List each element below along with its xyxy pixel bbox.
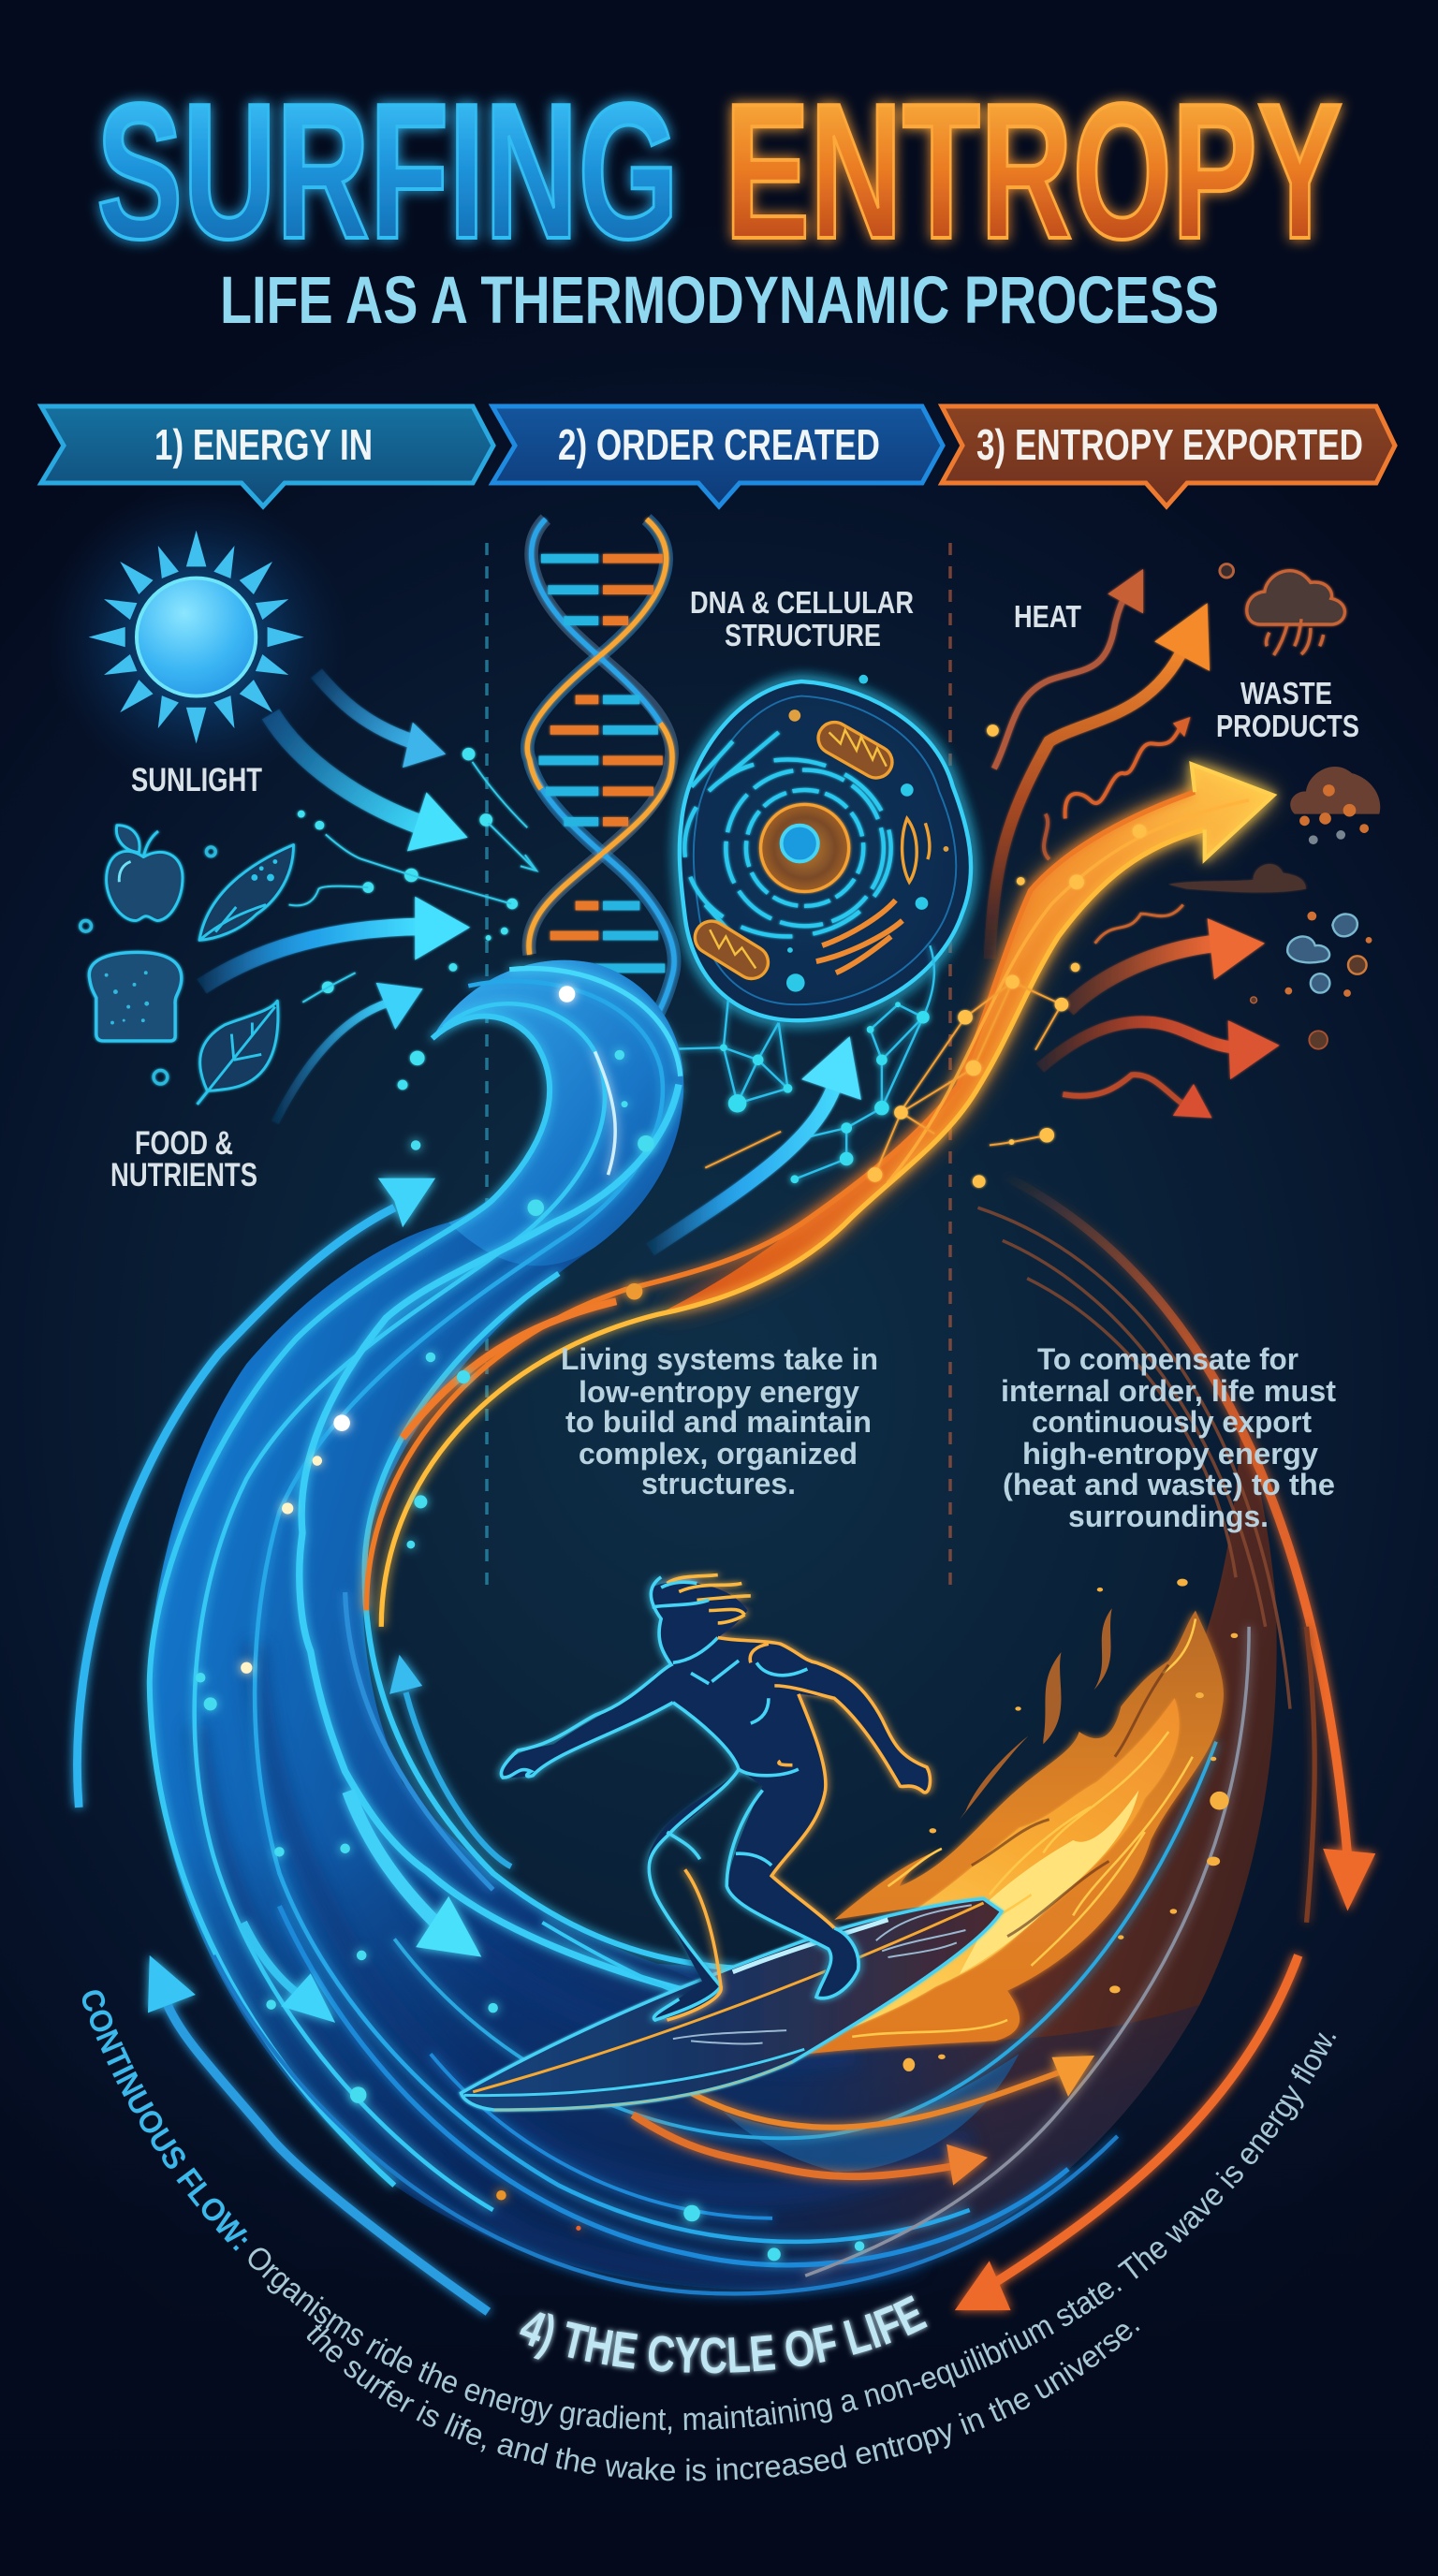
- entropy arrows: [990, 569, 1280, 1118]
- icon: ring dot: [1220, 564, 1234, 578]
- surfboard: [461, 1899, 1002, 2110]
- organelle rings: [684, 732, 891, 950]
- arrow: nutrients: [275, 983, 423, 1122]
- energy-in arrows and particles: [81, 673, 536, 1122]
- text: order created: Living systems take in: [561, 1342, 878, 1376]
- step banners: [41, 406, 1395, 506]
- icon: sun: [45, 488, 347, 787]
- banner 1: energy in: [41, 406, 493, 506]
- label: DNA and cellular structure: [690, 585, 914, 652]
- surfer orange outline: [668, 1638, 930, 2020]
- text: entropy exported: (heat and waste) to the: [1003, 1468, 1335, 1501]
- arrow: heat: [994, 569, 1143, 768]
- wisp lower: [1095, 905, 1183, 944]
- wave body shading: [150, 1683, 1199, 2290]
- column divider: left: [485, 543, 489, 1587]
- wake arrow: upper: [692, 2056, 1094, 2128]
- icon: ash cloud: [1290, 767, 1380, 844]
- arrow: small red: [1063, 1075, 1212, 1118]
- icon: smoke plume: [1168, 864, 1306, 892]
- orange node lines: [705, 982, 1062, 1175]
- arrow: red-orange: [1067, 918, 1265, 1009]
- energy particles: [289, 748, 536, 1090]
- dark wave bands: [198, 1643, 970, 2279]
- mitochondria and golgi: [689, 716, 930, 985]
- network and flow overlay: [651, 724, 1146, 1250]
- arrow head: squiggle: [1173, 717, 1191, 737]
- label: food and nutrients: [110, 1125, 257, 1193]
- wave flow lines: [150, 969, 1249, 2293]
- text: order created: structures.: [641, 1467, 796, 1500]
- network below cell: [641, 945, 934, 1183]
- surfer: [500, 1575, 930, 2020]
- text: entropy exported: high-entropy energy: [1022, 1437, 1318, 1471]
- text: order created: low-entropy energy: [579, 1375, 859, 1409]
- text: order created: complex, organized: [579, 1437, 858, 1471]
- small flame wisp: [1044, 814, 1049, 859]
- arc arrow: right orange: [1003, 1175, 1375, 1911]
- curved caption line 2: the surfer is life, and the wake is increased entropy in the universe.: [307, 2324, 1140, 2481]
- DNA rungs: [539, 559, 665, 968]
- arrow: orange rising: [990, 603, 1210, 959]
- banner 3: entropy exported: [942, 406, 1395, 506]
- wave crest: [433, 960, 683, 1266]
- flames: [744, 1579, 1238, 2071]
- label: waste products: WASTE: [1240, 676, 1332, 710]
- heading: the cycle of life: 4) THE CYCLE OF LIFE: [517, 2291, 931, 2378]
- surfer hair: [653, 1575, 751, 1623]
- arc arrow: outer left top: [77, 1178, 435, 1808]
- text: entropy exported: surroundings.: [1068, 1500, 1269, 1533]
- icon: DNA helix: [527, 520, 674, 1018]
- text: entropy exported: continuously export: [1032, 1405, 1312, 1439]
- nucleus: [761, 804, 849, 891]
- surfer cyan outline: [501, 1577, 858, 2020]
- icon: apple: [107, 826, 183, 921]
- label: waste products: [1216, 676, 1359, 743]
- label: heat: HEAT: [1014, 599, 1081, 634]
- arrow: cyan small: [243, 1923, 335, 2023]
- text: entropy exported: [1001, 1342, 1336, 1533]
- arc arrow: outer left bottom: [148, 1955, 488, 2312]
- title word: surfing: SURFING: [96, 64, 679, 279]
- text: entropy exported: internal order, life must: [1001, 1374, 1336, 1408]
- arrow: thick cyan: [348, 1791, 481, 1957]
- banner 2: order created: 2) ORDER CREATED: [558, 420, 880, 469]
- icon: storm cloud: [1247, 571, 1344, 655]
- label: waste products: PRODUCTS: [1216, 709, 1359, 743]
- curved caption line 1: CONTINUOUS FLOW: Organisms ride the energy gradient, maintaining a non-equilibrium state. The wave is energy flow.: [82, 1990, 1337, 2434]
- arrow: sunlight lower: [271, 714, 468, 851]
- label: sunlight: SUNLIGHT: [131, 762, 262, 798]
- icon: leaf: [198, 1001, 278, 1105]
- wave body: [150, 960, 1277, 2290]
- lighter wave band: [723, 2054, 1019, 2173]
- arrow: red lower: [1040, 1020, 1280, 1079]
- label: DNA and cellular structure: STRUCTURE: [725, 618, 881, 652]
- banner 1: energy in: 1) ENERGY IN: [154, 420, 373, 469]
- text: order created: to build and maintain: [565, 1405, 872, 1439]
- title: [96, 64, 1343, 279]
- main wave: [77, 764, 1375, 2312]
- arrow: inner thin: [389, 1655, 511, 1866]
- arrow: sunlight upper: [316, 673, 446, 768]
- label: food and nutrients: FOOD &: [135, 1125, 233, 1162]
- big cyan arrow: [651, 1036, 861, 1250]
- text: order created: [561, 1342, 878, 1500]
- ribbon edge lines: [366, 764, 1273, 1627]
- wake arrow: lower: [633, 2115, 988, 2186]
- heat squiggle: [1065, 728, 1180, 818]
- waste icons: [1168, 564, 1380, 1049]
- flame tongues: [852, 1618, 1196, 2037]
- surfer silhouette: [500, 1582, 930, 2020]
- label: food and nutrients: NUTRIENTS: [110, 1157, 257, 1193]
- label: DNA and cellular structure: DNA & CELLULAR: [690, 585, 914, 620]
- icon: particles: [1251, 912, 1372, 1049]
- orange nodes: [868, 724, 1146, 1188]
- food icons: [89, 826, 293, 1105]
- wave particles: [196, 986, 864, 2261]
- arc arrow: bottom orange: [955, 1627, 1314, 2310]
- thin arcs right: [977, 1208, 1290, 1709]
- icon: seed pod leaf: [199, 845, 293, 940]
- icon: bread: [89, 952, 182, 1041]
- column divider: right: [948, 543, 952, 1587]
- energy ribbon: orange: [657, 764, 1273, 1314]
- banner 2: order created: [492, 406, 943, 506]
- text: entropy exported: To compensate for: [1037, 1342, 1299, 1376]
- arrow: food main: [202, 897, 470, 987]
- icon: cell: [680, 675, 971, 1020]
